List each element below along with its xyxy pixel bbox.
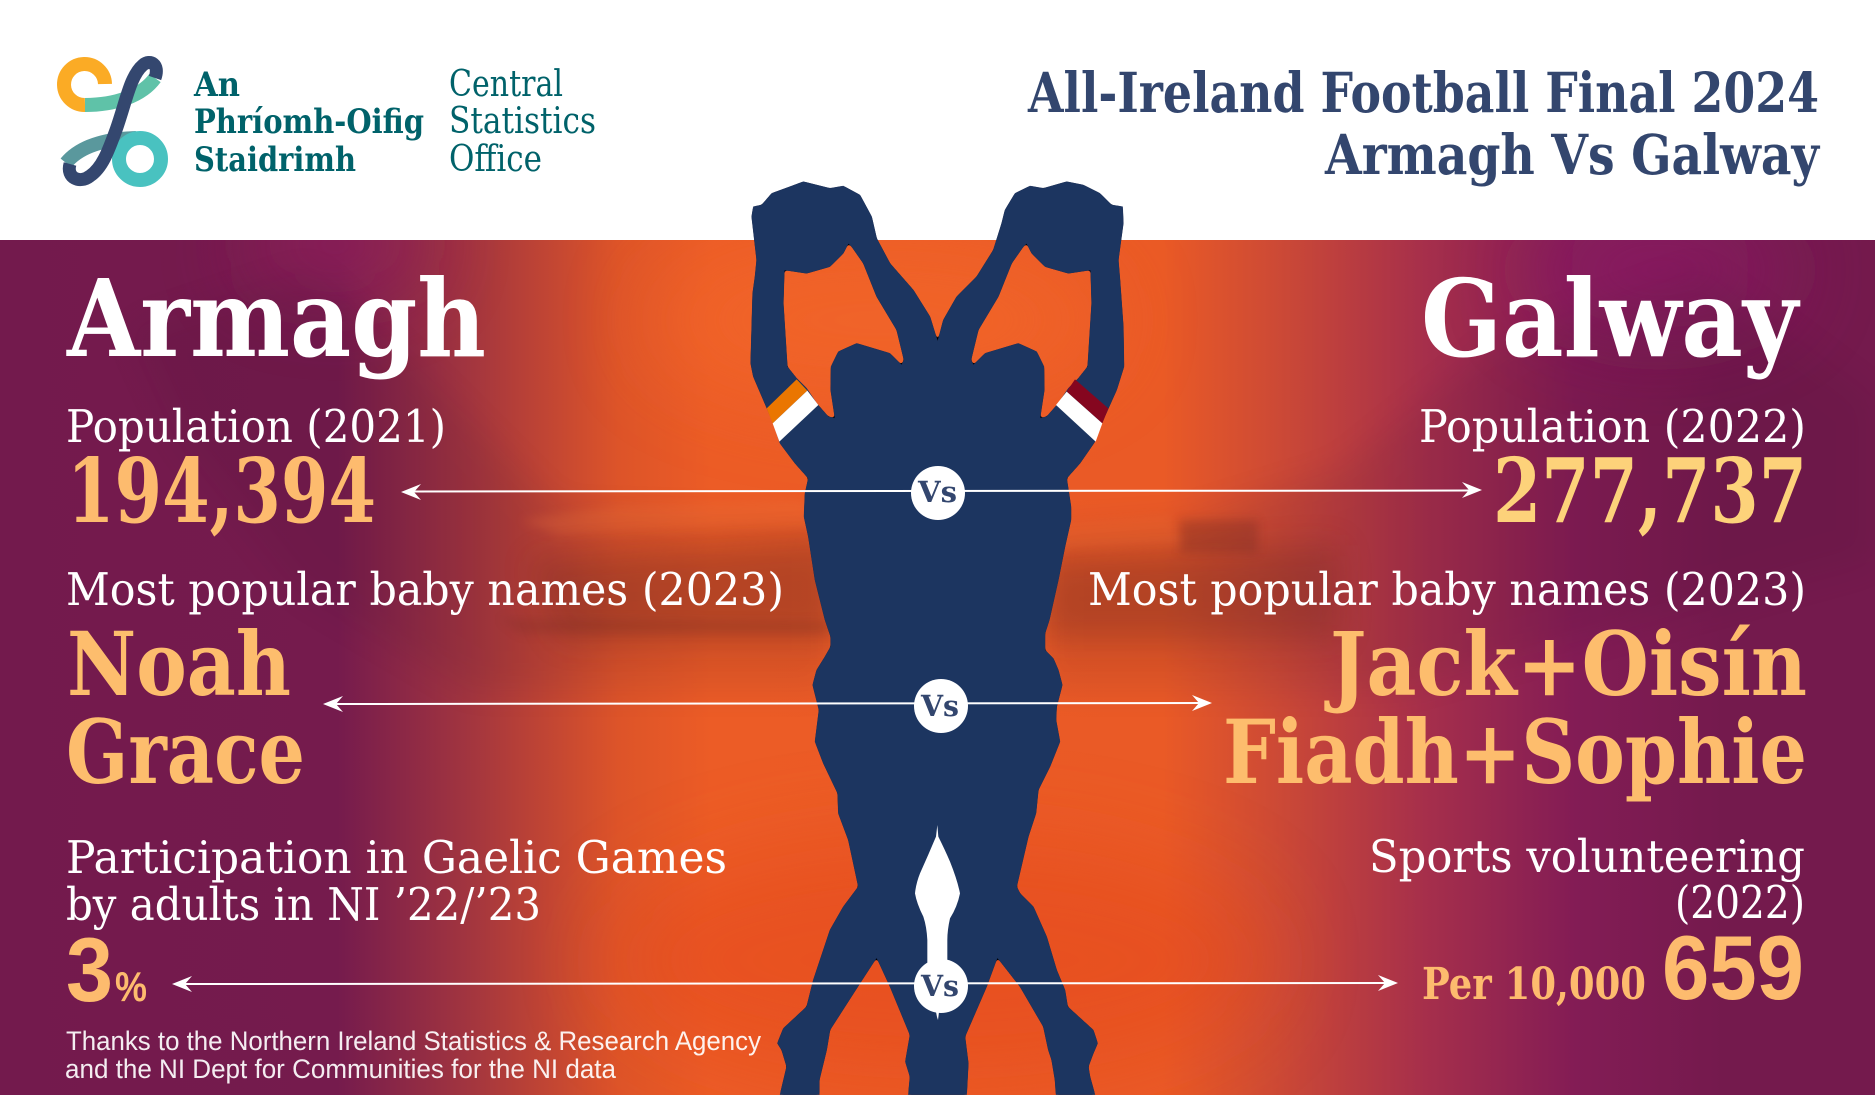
stat: sports volunteering: Per 10,000 xyxy=(1422,959,1646,1010)
heading: Galway: Galway xyxy=(1421,257,1800,382)
armband: Armagh orange and white xyxy=(767,379,818,442)
badge: Vs baby names xyxy=(914,679,968,733)
stat: Armagh baby names: Most popular baby names (2023) xyxy=(66,563,784,616)
arrow: sport comparison xyxy=(172,975,1398,992)
stat: Galway baby names xyxy=(1088,563,1807,804)
stat: Galway population: Population (2022) xyxy=(1419,400,1806,453)
title xyxy=(1027,60,1821,187)
stat: Galway population xyxy=(1419,400,1807,543)
logo: Irish name xyxy=(193,65,424,180)
logo: English name: Statistics xyxy=(449,101,596,142)
logo: Irish name: An xyxy=(193,65,240,105)
stat: sports volunteering: Sports volunteering xyxy=(1369,830,1805,883)
magenta glow right xyxy=(1588,240,1765,324)
magenta glow left xyxy=(254,240,396,303)
footnote: Thanks to the Northern Ireland Statistics & Research Agency xyxy=(66,1026,761,1056)
stat: Armagh population: 194,394 xyxy=(67,438,376,543)
stat: Armagh population: Population (2021) xyxy=(66,400,446,453)
stat: Gaelic Games participation: % xyxy=(115,963,147,1010)
stat: Gaelic Games participation: 3 xyxy=(66,920,113,1021)
stat: Gaelic Games participation: Participation in Gaelic Games xyxy=(66,831,727,884)
arrow: baby names comparison xyxy=(323,695,1212,712)
stat: sports volunteering: 659 xyxy=(1662,918,1804,1019)
stat: Galway baby names: Most popular baby names (2023) xyxy=(1088,563,1806,616)
logo: English name xyxy=(449,64,596,180)
footnote xyxy=(65,1026,761,1084)
badge: Vs baby names: Vs xyxy=(920,689,959,723)
heading: Armagh: Armagh xyxy=(66,257,486,382)
stat: sports volunteering: (2022) xyxy=(1675,876,1805,929)
logo: Irish name: Staidrimh xyxy=(194,140,356,180)
logo: Irish name: Phríomh-Oifig xyxy=(194,102,424,142)
logo: English name: Central xyxy=(449,64,563,105)
arrow: population comparison xyxy=(401,482,1482,500)
stat: Armagh baby names: Noah xyxy=(67,612,291,716)
armband: Galway maroon and white xyxy=(1056,379,1108,442)
stat: Armagh baby names xyxy=(66,563,784,804)
footnote: and the NI Dept for Communities for the NI data xyxy=(65,1054,617,1084)
scoreboard xyxy=(1180,520,1258,553)
stat: Gaelic Games participation: by adults in NI ’22/’23 xyxy=(66,878,541,931)
lighter sky glow xyxy=(650,240,1110,400)
illustration: mirrored players silhouette xyxy=(751,182,1124,1095)
saturated pitch glow xyxy=(680,872,1236,1052)
gap between the legs xyxy=(915,825,960,963)
badge: Vs sport xyxy=(914,959,968,1020)
logo: CSO mark xyxy=(64,63,161,180)
stand left xyxy=(388,387,830,692)
stat: Galway baby names: Jack+Oisín xyxy=(1324,612,1807,716)
white header band xyxy=(0,0,1875,240)
badge: Vs population: Vs xyxy=(917,475,957,509)
badge: Vs population xyxy=(911,466,965,520)
stat: Gaelic Games participation xyxy=(66,831,727,1021)
badge: Vs sport: Vs xyxy=(920,969,959,1003)
stat: Armagh baby names: Grace xyxy=(66,700,305,804)
logo: English name: Office xyxy=(449,139,542,180)
stat: sports volunteering xyxy=(1369,830,1805,1019)
stand right xyxy=(1045,352,1566,692)
